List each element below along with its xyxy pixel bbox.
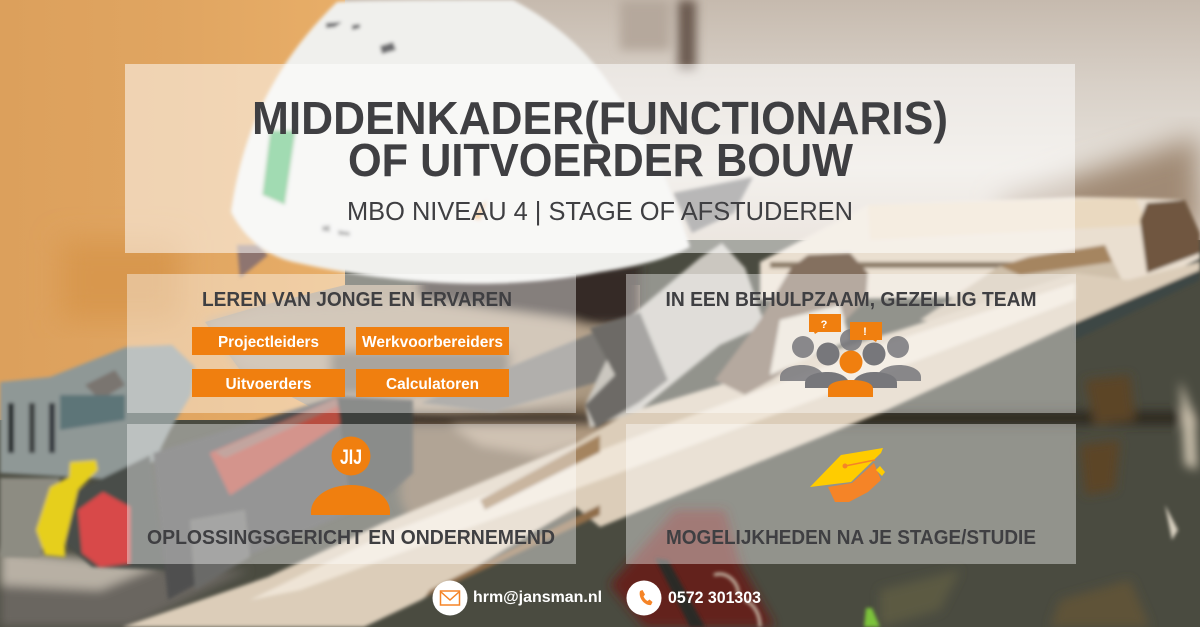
dark strip between panels — [830, 411, 1200, 425]
title: MIDDENKADER(FUNCTIONARIS) — [252, 92, 948, 144]
subtitle: MBO NIVEAU 4 | STAGE OF AFSTUDEREN — [347, 196, 853, 226]
red patch — [610, 510, 775, 627]
icon: team with speech bubbles: ! — [863, 326, 867, 338]
icon: graduation cap — [810, 448, 885, 502]
heading: MOGELIJKHEDEN NA JE STAGE/STUDIE — [666, 527, 1036, 549]
icon: person JIJ: JIJ — [340, 446, 362, 469]
icon: team with speech bubbles — [780, 314, 921, 397]
helmet sticker — [262, 130, 296, 205]
drill end cap — [0, 478, 60, 557]
upper right board — [760, 197, 1200, 300]
heading: IN EEN BEHULPZAAM, GEZELLIG TEAM — [666, 289, 1036, 311]
heading: LEREN VAN JONGE EN ERVAREN — [202, 289, 512, 311]
role tags: Uitvoerders — [226, 376, 312, 393]
contact: phone: 0572 301303 — [668, 589, 761, 607]
contact: phone — [626, 580, 761, 616]
helmet — [231, 0, 690, 284]
role tags — [192, 327, 509, 397]
mud stains on metal — [1085, 375, 1135, 425]
paint flakes and strap on metal — [1165, 505, 1178, 540]
diagonal plank — [122, 262, 1200, 627]
leather glove — [205, 300, 600, 415]
grey strut — [673, 177, 753, 233]
post behind helmet — [678, 0, 696, 70]
cylinder and tool head — [585, 243, 765, 428]
title: OF UITVOERDER BOUW — [348, 134, 854, 186]
panel: mogelijkheden — [626, 424, 1076, 564]
icon: team with speech bubbles: ? — [821, 319, 828, 331]
drill body — [0, 345, 195, 480]
floor — [0, 550, 250, 627]
dark gap under helmet — [420, 265, 640, 325]
title — [252, 92, 948, 186]
panel: leren van jonge en ervaren — [127, 274, 576, 413]
panel: oplossingsgericht — [127, 424, 576, 564]
soft backdrop — [60, 135, 1200, 320]
role tags: Werkvoorbereiders — [362, 334, 503, 351]
wood block — [920, 245, 1128, 330]
role tags: Calculatoren — [386, 376, 479, 393]
canvas below — [400, 400, 640, 560]
battery — [153, 396, 413, 600]
role tags: Projectleiders — [218, 334, 319, 351]
icon: person JIJ — [311, 436, 390, 515]
steel tool — [421, 310, 640, 412]
panel: title backdrop — [125, 64, 1075, 253]
metal box edge — [1075, 258, 1200, 340]
helmet vent slots — [380, 42, 396, 54]
heading: OPLOSSINGSGERICHT EN ONDERNEMEND — [147, 527, 555, 549]
contact: email — [432, 580, 602, 616]
panel: behulpzaam team — [626, 274, 1076, 413]
contact: email: hrm@jansman.nl — [473, 589, 602, 606]
strap — [715, 253, 868, 395]
